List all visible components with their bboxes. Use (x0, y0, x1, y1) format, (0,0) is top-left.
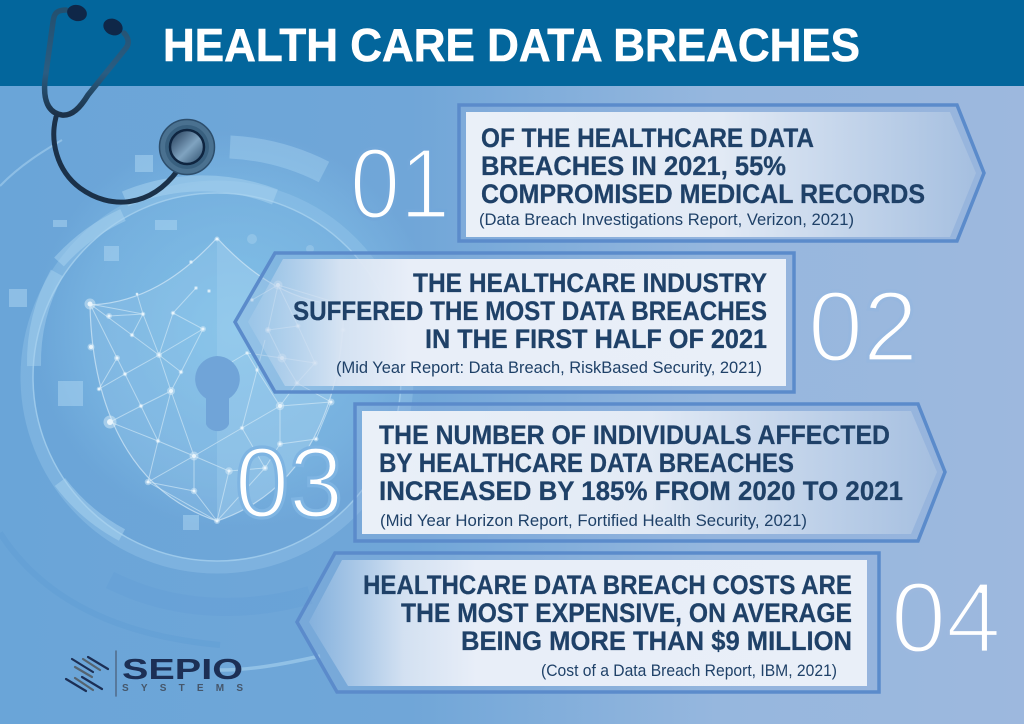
header bar (0, 0, 1024, 86)
statement 03: THE NUMBER OF INDIVIDUALS AFFECTED (379, 420, 890, 450)
icon: stethoscope (45, 3, 214, 202)
statement 01: BREACHES IN 2021, 55% (481, 151, 786, 181)
statement 04: THE MOST EXPENSIVE, ON AVERAGE (401, 598, 852, 628)
logo: Sepio Systems: SYSTEMS (122, 683, 243, 694)
keyhole (195, 356, 240, 431)
logo: Sepio Systems: SEPIO (122, 654, 243, 686)
panel 01 (350, 105, 984, 241)
statement 02: IN THE FIRST HALF OF 2021 (425, 324, 767, 354)
panel 02 (235, 253, 918, 392)
statement 02: SUFFERED THE MOST DATA BREACHES (293, 296, 767, 326)
number 02: 02 (808, 271, 918, 383)
statement 02 (293, 268, 767, 377)
title: HEALTH CARE DATA BREACHES (163, 19, 860, 71)
statement 03 (379, 420, 903, 530)
logo: Sepio Systems (66, 651, 243, 696)
statement 03: INCREASED BY 185% FROM 2020 TO 2021 (379, 476, 903, 506)
statement 03: BY HEALTHCARE DATA BREACHES (379, 448, 794, 478)
statement 01 (479, 123, 925, 229)
shield and network illustration (0, 140, 407, 670)
number 04: 04 (891, 562, 1001, 674)
panel 04 (297, 553, 1001, 692)
statement 04: (Cost of a Data Breach Report, IBM, 2021) (541, 662, 837, 680)
statement 04 (363, 570, 852, 680)
statement 02: THE HEALTHCARE INDUSTRY (413, 268, 767, 298)
number 03: 03 (235, 427, 343, 539)
statement 01: COMPROMISED MEDICAL RECORDS (481, 179, 925, 209)
statement 04: HEALTHCARE DATA BREACH COSTS ARE (363, 570, 852, 600)
statement 01: OF THE HEALTHCARE DATA (481, 123, 814, 153)
statement 02: (Mid Year Report: Data Breach, RiskBased Security, 2021) (336, 359, 762, 377)
statement 04: BEING MORE THAN $9 MILLION (461, 626, 852, 656)
statement 03: (Mid Year Horizon Report, Fortified Health Security, 2021) (380, 512, 807, 530)
number 01: 01 (350, 128, 450, 240)
statement 01: (Data Breach Investigations Report, Verizon, 2021) (479, 211, 854, 229)
panel 03 (235, 404, 945, 541)
